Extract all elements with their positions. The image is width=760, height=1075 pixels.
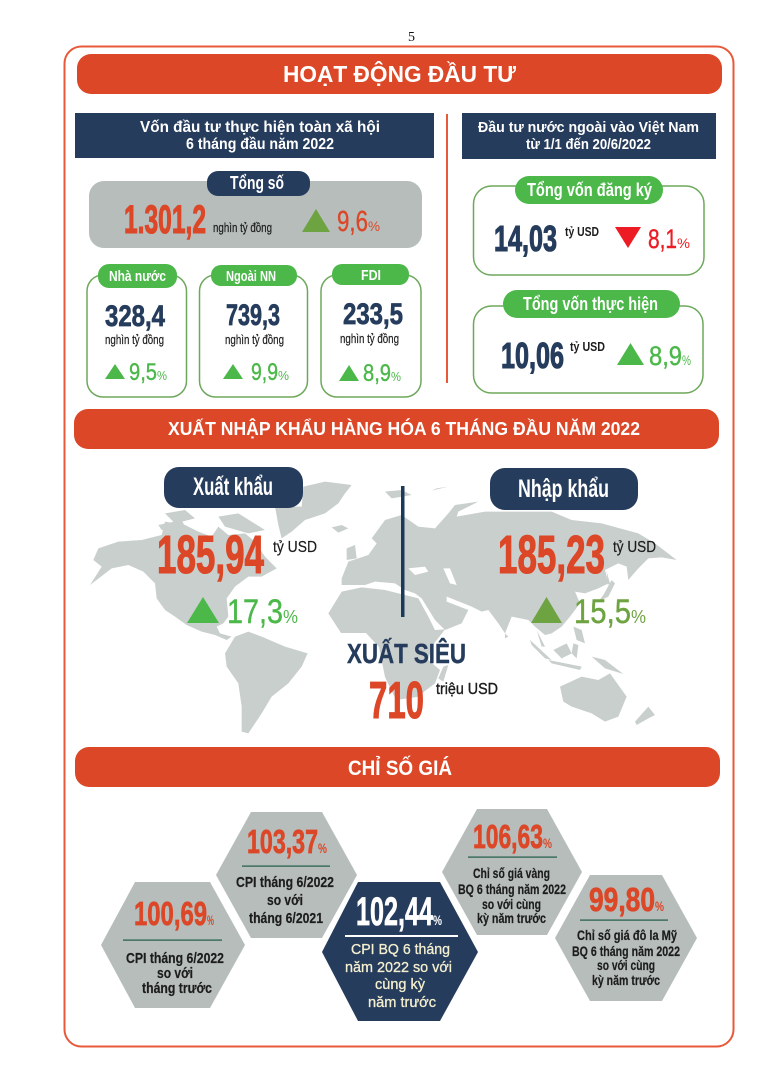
card: state sector: nghìn tỷ đồng bbox=[105, 332, 164, 347]
card: FDI: % bbox=[391, 369, 401, 384]
label: imports: Nhập khẩu bbox=[518, 475, 609, 503]
hexagon: average CPI six months: % bbox=[433, 912, 442, 928]
heading: investment activity: HOẠT ĐỘNG ĐẦU TƯ bbox=[283, 60, 517, 87]
hexagon: US dollar index: Chỉ số giá đô la Mỹ bbox=[577, 927, 677, 943]
stat: trade surplus: triệu USD bbox=[436, 681, 498, 698]
card: non-state sector: Ngoài NN bbox=[226, 268, 276, 285]
hexagon: CPI vs same month last year: 103,37 bbox=[247, 823, 318, 860]
hexagon: CPI vs previous month: % bbox=[207, 912, 214, 928]
stat: import value: 15,5 bbox=[574, 593, 631, 631]
card: registered capital: tỷ USD bbox=[565, 224, 599, 239]
hexagon: gold price index: Chỉ số giá vàng bbox=[473, 865, 550, 881]
hexagon: gold price index: so với cùng bbox=[482, 896, 541, 912]
stat: import value: % bbox=[631, 607, 646, 627]
heading: trade bbox=[74, 409, 719, 449]
hexagon: US dollar index: 99,80 bbox=[589, 881, 655, 918]
panel heading: foreign investment: từ 1/1 đến 20/6/2022 bbox=[526, 136, 651, 153]
stat: import value: 185,23 bbox=[498, 525, 605, 585]
hexagon: CPI vs same month last year bbox=[216, 812, 357, 938]
hexagon: CPI vs same month last year: tháng 6/2021 bbox=[249, 910, 323, 927]
card: disbursed capital: Tổng vốn thực hiện bbox=[523, 294, 658, 314]
panel: total capital bbox=[89, 171, 422, 248]
card: state sector: Nhà nước bbox=[109, 268, 166, 285]
heading: price indices bbox=[75, 747, 720, 787]
hexagon: CPI vs previous month: tháng trước bbox=[142, 980, 212, 997]
panel heading: total social investment: 6 tháng đầu năm 2022 bbox=[186, 136, 334, 153]
label: exports: Xuất khẩu bbox=[193, 473, 273, 501]
hexagon: CPI vs previous month: CPI tháng 6/2022 bbox=[126, 950, 224, 967]
hexagon: US dollar index: kỳ năm trước bbox=[592, 972, 660, 988]
label: exports bbox=[164, 467, 303, 508]
stat: export value: 17,3 bbox=[227, 593, 283, 631]
stat: export value: 185,94 bbox=[157, 525, 264, 585]
card: FDI: 8,9 bbox=[363, 360, 391, 387]
panel: total capital: 1.301,2 bbox=[124, 198, 206, 242]
card: state sector: 9,5 bbox=[129, 359, 157, 386]
card: non-state sector bbox=[200, 265, 308, 397]
hexagon: average CPI six months: năm trước bbox=[368, 994, 436, 1011]
heading: trade: XUẤT NHẬP KHẨU HÀNG HÓA 6 THÁNG ĐẦU NĂM 2022 bbox=[168, 418, 640, 439]
hexagon: average CPI six months: CPI BQ 6 tháng bbox=[351, 941, 450, 958]
card: disbursed capital: tỷ USD bbox=[570, 339, 605, 354]
stat: export value bbox=[157, 525, 317, 631]
hexagon: CPI vs previous month: so với bbox=[157, 965, 193, 982]
card: FDI: FDI bbox=[361, 267, 381, 284]
stat: export value: tỷ USD bbox=[273, 539, 317, 556]
hexagon: US dollar index: so với cùng bbox=[597, 957, 655, 973]
card: non-state sector: % bbox=[278, 368, 289, 383]
hexagon: CPI vs previous month bbox=[101, 882, 245, 1008]
card: non-state sector: 9,9 bbox=[251, 359, 278, 386]
card: disbursed capital: % bbox=[682, 352, 691, 368]
panel heading: foreign investment bbox=[462, 113, 716, 159]
heading: investment activity bbox=[77, 54, 722, 94]
section: investment activity bbox=[75, 54, 722, 397]
card: FDI: 233,5 bbox=[343, 298, 403, 331]
hexagon: average CPI six months: năm 2022 so với bbox=[345, 959, 452, 976]
hexagon: CPI vs same month last year: so với bbox=[267, 892, 303, 909]
card: state sector: 328,4 bbox=[105, 300, 165, 333]
card: FDI: nghìn tỷ đồng bbox=[340, 331, 399, 346]
world map bbox=[90, 482, 677, 733]
panel: total capital: Tổng số bbox=[230, 173, 284, 193]
card: registered capital: 8,1 bbox=[648, 224, 677, 254]
heading: price indices: CHỈ SỐ GIÁ bbox=[348, 756, 452, 780]
hexagon: average CPI six months: 102,44 bbox=[356, 890, 433, 934]
card: non-state sector: nghìn tỷ đồng bbox=[225, 332, 284, 347]
hexagon: average CPI six months: cùng kỳ bbox=[375, 976, 425, 993]
stat: trade surplus: 710 bbox=[369, 672, 424, 730]
card: disbursed capital bbox=[474, 290, 703, 393]
hexagon: average CPI six months bbox=[322, 882, 478, 1021]
hexagon: gold price index: kỳ năm trước bbox=[477, 910, 546, 926]
panel: total capital: 9,6 bbox=[337, 206, 368, 238]
card: registered capital: % bbox=[677, 235, 690, 251]
card: registered capital bbox=[474, 176, 704, 275]
hexagon: gold price index bbox=[442, 809, 582, 935]
hexagon: gold price index: % bbox=[543, 835, 552, 851]
stat: import value: tỷ USD bbox=[613, 539, 656, 556]
card: non-state sector: 739,3 bbox=[226, 299, 280, 332]
hexagon: US dollar index: BQ 6 tháng năm 2022 bbox=[572, 943, 680, 959]
card: FDI bbox=[321, 264, 421, 397]
hexagon: CPI vs previous month: 100,69 bbox=[134, 895, 207, 932]
hexagon: gold price index: 106,63 bbox=[473, 818, 543, 855]
card: state sector bbox=[87, 264, 186, 397]
panel heading: total social investment bbox=[75, 113, 434, 158]
panel: total capital: % bbox=[368, 218, 380, 234]
card: disbursed capital: 10,06 bbox=[501, 335, 564, 376]
card: registered capital: Tổng vốn đăng ký bbox=[527, 180, 652, 200]
section: price indices bbox=[75, 747, 720, 1021]
card: disbursed capital: 8,9 bbox=[649, 341, 682, 371]
stat: import value bbox=[498, 525, 656, 631]
section: trade bbox=[74, 409, 719, 733]
hexagon: US dollar index: % bbox=[655, 898, 664, 914]
panel heading: total social investment: Vốn đầu tư thực hiện toàn xã hội bbox=[140, 119, 380, 136]
hexagon: US dollar index bbox=[555, 875, 697, 1001]
panel: total capital: nghìn tỷ đồng bbox=[213, 220, 272, 235]
label: imports bbox=[490, 468, 638, 510]
card: registered capital: 14,03 bbox=[494, 218, 557, 259]
card: state sector: % bbox=[157, 368, 167, 383]
stat: export value: % bbox=[283, 607, 298, 627]
divider line in map bbox=[401, 486, 404, 617]
panel heading: foreign investment: Đầu tư nước ngoài vào Việt Nam bbox=[478, 119, 699, 136]
stat: trade surplus bbox=[347, 638, 498, 730]
hexagon: gold price index: BQ 6 tháng năm 2022 bbox=[458, 881, 566, 897]
hexagon: CPI vs same month last year: CPI tháng 6/2022 bbox=[236, 874, 334, 891]
page number: 5 bbox=[408, 30, 415, 45]
stat: trade surplus: XUẤT SIÊU bbox=[347, 638, 466, 669]
hexagon: CPI vs same month last year: % bbox=[318, 840, 327, 856]
